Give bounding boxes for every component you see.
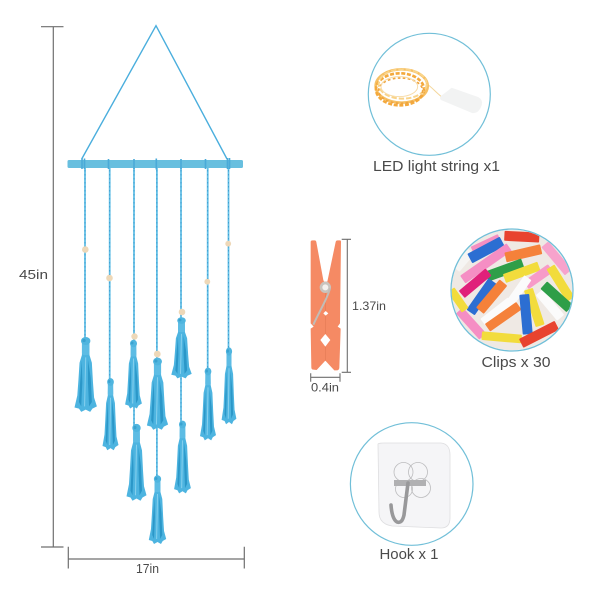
clip hole [320, 334, 330, 347]
LED circle outline [368, 33, 490, 155]
icon: LED copper coil [376, 69, 445, 105]
wooden rod wrapped in cord [68, 160, 243, 168]
icon: hook plate [394, 480, 426, 486]
clip spring [313, 283, 330, 325]
clip height dimension: 1.37in [342, 239, 351, 372]
clip body [311, 240, 341, 370]
height dimension: 45in [41, 27, 64, 547]
icon: metal hook [391, 483, 408, 522]
hanging rope triangle [82, 26, 227, 159]
tassels [74, 317, 236, 544]
label: 45in: 45in [19, 267, 48, 282]
width dimension: 17in [68, 547, 244, 568]
label: 17in: 17in [136, 561, 159, 576]
icon: flower outline [394, 462, 430, 498]
label: 1.37in: 1.37in [352, 299, 386, 313]
clip small notch [323, 311, 328, 316]
panel: clips [448, 229, 575, 351]
icon: transparent adhesive pad [378, 443, 450, 528]
orange clip illustration [311, 240, 341, 370]
icon: battery box [440, 88, 482, 113]
rod knots [82, 158, 230, 170]
label: Clips x 30: Clips x 30 [482, 354, 550, 371]
hook circle outline [350, 423, 473, 545]
label: LED light string x1: LED light string x1 [373, 158, 500, 175]
clip width dimension: 0.4in [311, 373, 340, 382]
vertical strings [85, 166, 228, 479]
clips background [452, 230, 572, 350]
clips photo [448, 230, 575, 350]
panel: hook [350, 423, 473, 545]
wooden beads [82, 241, 231, 357]
clip centre split [324, 290, 326, 361]
label: Hook x 1: Hook x 1 [380, 546, 438, 563]
clips circle outline [451, 229, 573, 351]
panel: LED light string [368, 33, 490, 155]
label: 0.4in: 0.4in [311, 380, 339, 394]
scattered clips [448, 231, 575, 348]
wall hanging with tassels [68, 26, 243, 544]
